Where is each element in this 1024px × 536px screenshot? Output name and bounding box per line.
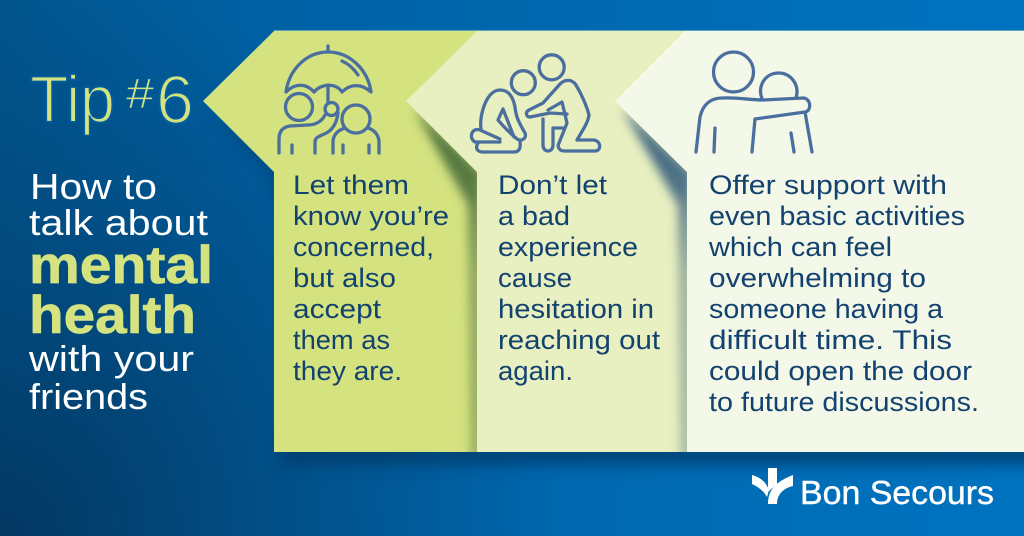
- text: concerned: them as: [293, 325, 390, 355]
- text: support: which can feel: [708, 232, 892, 262]
- panel shadow on background: [215, 112, 1024, 464]
- logo: Bon Secours: [752, 468, 994, 511]
- heading: with your: [28, 338, 194, 379]
- shadow on second panel: [622, 108, 692, 460]
- icon: arm around shoulder: [696, 52, 812, 152]
- heading: talk about: [29, 202, 208, 243]
- tip label: #: [126, 70, 154, 118]
- text: support: difficult time. This: [709, 325, 952, 355]
- heading: [28, 166, 213, 417]
- text: hesitation: Don’t let: [498, 170, 608, 200]
- text: concerned: they are.: [293, 356, 402, 386]
- text: support: [708, 170, 979, 417]
- text: support: overwhelming to: [709, 263, 926, 293]
- text: hesitation: reaching out: [498, 325, 661, 355]
- text: hesitation: [498, 170, 661, 386]
- text: support: even basic activities: [709, 201, 965, 231]
- tip label: [30, 62, 194, 138]
- panel: concerned: [203, 31, 1024, 452]
- heading: How to: [30, 166, 157, 207]
- heading: mental: [29, 236, 213, 295]
- heading: friends: [29, 376, 148, 417]
- text: hesitation: experience: [498, 232, 638, 262]
- panel: hesitation: [406, 31, 1024, 452]
- tip label: Tip: [30, 62, 115, 136]
- heading: health: [29, 286, 196, 345]
- icon: person comforting kneeling person: [471, 55, 600, 152]
- panel top edge: [274, 30, 1024, 31]
- tip label: 6: [156, 62, 194, 138]
- text: concerned: [293, 170, 449, 386]
- text: concerned: but also: [293, 263, 396, 293]
- text: support: to future discussions.: [709, 387, 979, 417]
- text: support: someone having a: [709, 294, 944, 324]
- shadow on first panel: [414, 108, 482, 460]
- text: concerned: Let them: [293, 170, 409, 200]
- text: concerned: concerned,: [293, 232, 434, 262]
- text: support: Offer support with: [709, 170, 947, 200]
- text: concerned: know you’re: [293, 201, 449, 231]
- icon: umbrella over two people: [279, 46, 379, 153]
- text: support: could open the door: [709, 356, 972, 386]
- text: hesitation: hesitation in: [498, 294, 654, 324]
- text: hesitation: a bad: [498, 201, 570, 231]
- logo: Bon Secours: Bon Secours: [800, 474, 994, 511]
- text: hesitation: again.: [498, 356, 573, 386]
- text: hesitation: cause: [498, 263, 572, 293]
- text: concerned: accept: [293, 294, 382, 324]
- panel: support: [615, 31, 1024, 452]
